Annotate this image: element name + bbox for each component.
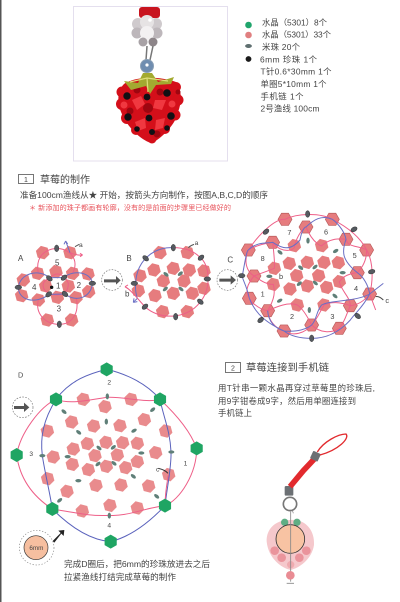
diagram A: 5 <box>55 259 60 268</box>
diagram C: 3 <box>330 312 334 321</box>
diagram D: D <box>18 370 23 379</box>
green leaves <box>124 73 174 94</box>
materials legend: 米珠 20个 <box>262 42 301 52</box>
section 1 heading: 草莓的制作 <box>40 173 90 186</box>
diagram D: 6mm <box>29 545 43 552</box>
silver cap <box>132 15 162 60</box>
cord loop <box>317 434 347 455</box>
icon: pink crystal <box>245 32 252 38</box>
berry body <box>118 78 181 143</box>
section 2 text <box>218 383 375 418</box>
jump ring <box>283 497 297 511</box>
diagram B: b <box>125 290 130 299</box>
diagram C: 7 <box>287 228 291 237</box>
product photo: strawberry pendant <box>74 6 228 161</box>
diagram D: 1 <box>184 461 188 468</box>
caption D: 完成D圈后，把6mm的珍珠放进去之后 <box>64 558 210 569</box>
section 1 heading: 1 <box>24 177 28 184</box>
caption D <box>64 558 210 582</box>
red cord <box>139 7 160 18</box>
section 2 text: 手机链上 <box>218 408 252 418</box>
strawberry outline <box>267 520 314 570</box>
diagram C: 4 <box>354 284 358 293</box>
diagram C: 6 <box>324 227 328 236</box>
diagram C <box>238 211 389 342</box>
diagram C: 1 <box>261 289 265 298</box>
arrow B to C <box>217 255 238 290</box>
assembled phone chain <box>267 434 347 583</box>
materials legend: T针0.6*30mm 1个 <box>260 66 332 76</box>
diagram A <box>13 241 97 328</box>
section 1 heading <box>18 173 90 186</box>
diagram D <box>11 362 203 565</box>
arrow B to C: C <box>227 255 233 264</box>
diagram C: b <box>279 272 283 281</box>
diagram B <box>125 240 212 320</box>
arrow: into D <box>12 397 33 418</box>
T pin <box>287 512 294 583</box>
diagram A: 2 <box>77 281 82 290</box>
icon: pearl <box>246 56 251 62</box>
diagram A: 4 <box>32 283 37 292</box>
diagram C: 5 <box>353 251 357 260</box>
diagram A: a <box>79 242 83 249</box>
diagram D: c <box>156 467 160 474</box>
icon: green crystal <box>245 22 252 28</box>
diagram D: 2 <box>107 380 111 387</box>
section 2 heading: 草莓连接到手机链 <box>246 361 329 374</box>
diagram D: 4 <box>107 523 111 530</box>
section 2 text: 用T针串一颗水晶再穿过草莓里的珍珠后, <box>218 383 375 393</box>
diagram B: a <box>195 240 199 247</box>
arrow to pearl <box>53 530 64 543</box>
diagram A: 3 <box>57 305 62 314</box>
section 2 text: 用9字钳卷成9字，然后用单圈连接到 <box>218 396 356 406</box>
strap <box>290 459 314 487</box>
arrow A to B <box>102 270 122 290</box>
diagram A: A <box>18 254 24 263</box>
materials legend: 2号渔线 100cm <box>260 104 320 114</box>
section 2 heading <box>226 361 329 374</box>
materials legend: 手机链 1个 <box>260 92 304 102</box>
materials legend <box>245 18 332 114</box>
caption D: 拉紧渔线打结完成草莓的制作 <box>64 571 176 582</box>
icon: seed bead <box>245 44 252 48</box>
diagram C: 8 <box>261 254 265 263</box>
diagram C: c <box>385 296 389 305</box>
materials legend: 水晶（5301）33个 <box>262 30 332 40</box>
red note: ＊ 新添加的珠子都画有轮廓，没有的是前面的步骤里已经做好的 <box>29 203 231 212</box>
clasp <box>285 486 293 496</box>
materials legend: 6mm 珍珠 1个 <box>260 54 318 64</box>
6mm pearl <box>19 530 54 565</box>
diagram D: 3 <box>29 451 33 458</box>
instruction line: 准备100cm渔线从★ 开始，按箭头方向制作，按图A,B,C,D的顺序 <box>20 189 268 200</box>
blue ring <box>140 60 154 72</box>
materials legend: 水晶（5301）8个 <box>262 18 328 28</box>
diagram A: 1 <box>56 281 61 290</box>
black beads <box>123 89 175 135</box>
materials legend: 单圈5*10mm 1个 <box>260 79 327 89</box>
diagram C: 2 <box>290 312 294 321</box>
section 2 heading: 2 <box>231 366 235 372</box>
diagram B: B <box>126 254 132 263</box>
